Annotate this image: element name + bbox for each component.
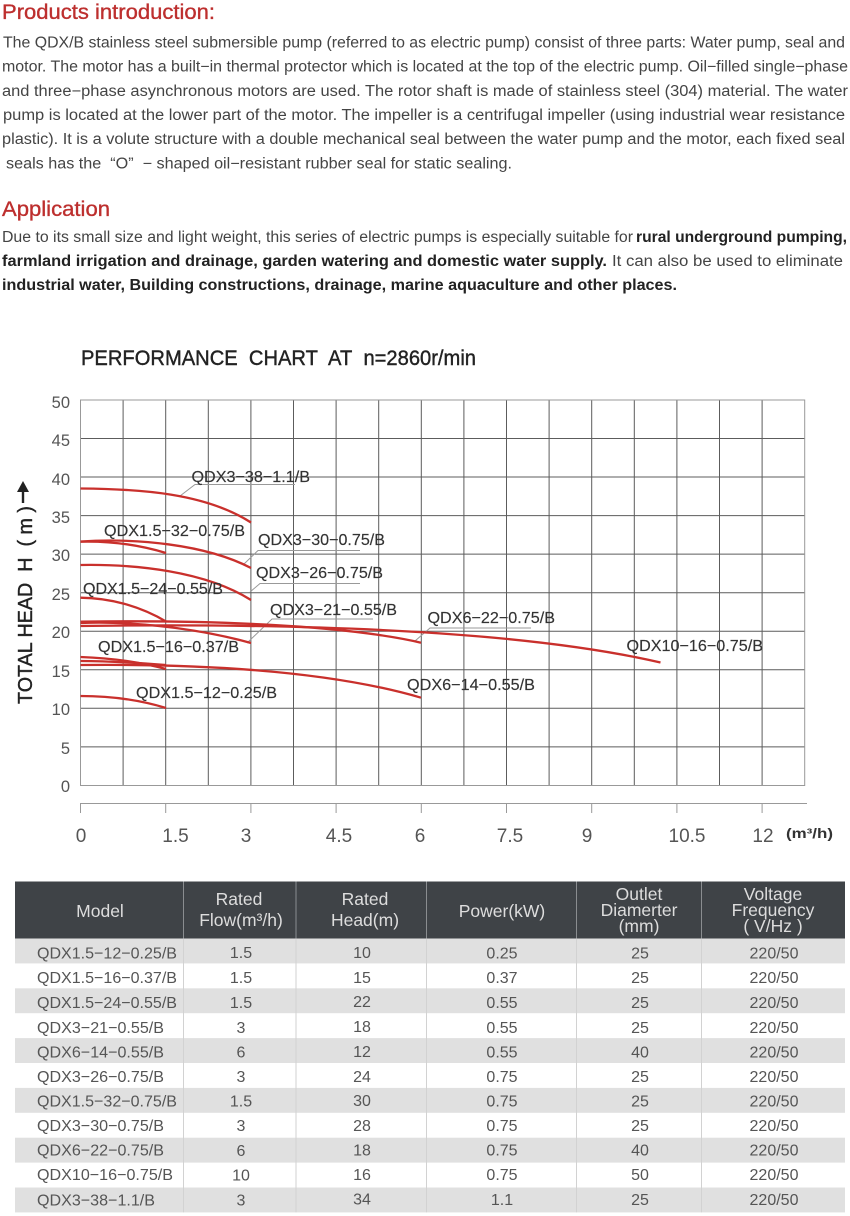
table header: Rated [342, 889, 388, 909]
row: QDX3-26-0.75/B: 0.75 [486, 1069, 518, 1086]
x axis tick labels: 6 [415, 826, 425, 847]
row: QDX1.5-12-0.25/B: 0.25 [486, 946, 518, 962]
text block: product description: and three−phase asynchronous motors are used. The rotor shaft is made of stainless steel (304) material. The water [2, 83, 848, 100]
y axis tick labels: 35 [52, 509, 70, 527]
x axis tick labels: 7.5 [497, 826, 523, 847]
table header: ( V/Hz ) [743, 916, 803, 936]
row: QDX1.5-16-0.37/B: 25 [631, 970, 649, 987]
text block: product description: The QDX/B stainless steel submersible pump (referred to as electric pump) consist of three parts: Water pump, seal and [3, 34, 845, 52]
x axis tick labels: 1.5 [162, 826, 189, 847]
table column separators [184, 938, 702, 1212]
row: QDX6-14-0.55/B: 0.55 [486, 1044, 518, 1062]
table header: Voltage [744, 884, 802, 904]
table header: Flow(m³/h) [199, 910, 283, 930]
row: QDX10-16-0.75/B: 0.75 [486, 1167, 518, 1184]
row: QDX1.5-32-0.75/B: 30 [353, 1093, 371, 1110]
row: QDX1.5-16-0.37/B: QDX1.5−16−0.37/B [37, 970, 177, 987]
curve labels: QDX3−26−0.75/B [256, 565, 383, 582]
text block: application description: rural underground pumping, [636, 229, 847, 246]
row: QDX6-22-0.75/B: QDX6−22−0.75/B [37, 1142, 164, 1160]
chart: performance chart [15, 347, 833, 847]
row: QDX6-22-0.75/B: 6 [237, 1143, 246, 1160]
text block: application description: It can also be used to eliminate [612, 253, 843, 270]
curve labels: QDX3−21−0.55/B [270, 602, 397, 619]
row: QDX1.5-12-0.25/B [37, 945, 799, 962]
row: QDX3-26-0.75/B: 3 [237, 1069, 246, 1086]
text block: application description: farmland irrigation and drainage, garden watering and domestic water supply. [2, 253, 607, 270]
y axis tick labels: 5 [61, 740, 70, 758]
icon: up arrow on y axis [22, 490, 24, 503]
row: QDX1.5-24-0.55/B: 220/50 [750, 995, 799, 1012]
curve labels: QDX3−38−1.1/B [192, 469, 310, 486]
text block: product description: plastic). It is a volute structure with a double mechanical seal between the water pump and the motor, each fixed seal [2, 131, 845, 148]
row: QDX3-21-0.55/B: 25 [631, 1020, 649, 1037]
row: QDX3-26-0.75/B: 25 [631, 1069, 649, 1086]
y axis title: TOTAL HEAD H ( m ) [15, 506, 37, 704]
row: QDX1.5-16-0.37/B: 0.37 [486, 970, 518, 987]
row: QDX1.5-32-0.75/B: 25 [631, 1094, 649, 1110]
table header: Frequency [732, 900, 815, 920]
text block: product description: motor. The motor has a built−in thermal protector which is located at the top of the electric pump. Oil−filled single−phase [2, 58, 848, 76]
row: QDX1.5-24-0.55/B: QDX1.5−24−0.55/B [37, 995, 177, 1012]
row: QDX3-38-1.1/B: 25 [631, 1192, 649, 1209]
y axis tick labels: 15 [52, 663, 70, 681]
table header: Head(m) [331, 910, 399, 930]
leader lines [180, 484, 531, 643]
text block: application description [2, 229, 847, 294]
row: QDX3-21-0.55/B: 3 [237, 1020, 246, 1037]
x axis tick labels: 0 [76, 826, 86, 847]
row: QDX3-38-1.1/B: 3 [237, 1192, 246, 1210]
x axis tick labels: 4.5 [326, 826, 352, 847]
curve labels: QDX10−16−0.75/B [626, 638, 763, 655]
row: QDX6-22-0.75/B: 220/50 [750, 1142, 799, 1160]
row: QDX3-21-0.55/B: 18 [353, 1019, 371, 1036]
row: QDX6-22-0.75/B: 40 [631, 1142, 649, 1160]
row: QDX3-21-0.55/B: 0.55 [486, 1020, 518, 1037]
row: QDX1.5-16-0.37/B: 1.5 [230, 970, 252, 987]
row: QDX1.5-24-0.55/B [37, 994, 799, 1012]
x axis tick labels: 10.5 [669, 826, 705, 847]
table header [15, 882, 845, 938]
row: QDX6-22-0.75/B: 18 [353, 1142, 371, 1160]
y axis tick labels: 40 [52, 471, 70, 489]
text block: product description: pump is located at the lower part of the motor. The impeller is a centrifugal impeller (using industrial wear resistance [3, 107, 845, 124]
row: QDX1.5-32-0.75/B [37, 1093, 799, 1110]
y axis tick labels: 50 [52, 394, 70, 412]
table header: Diamerter [601, 900, 678, 920]
y axis tick labels [52, 394, 70, 796]
y axis tick labels: 30 [52, 547, 70, 565]
row: QDX3-30-0.75/B: 25 [631, 1118, 649, 1135]
y axis tick labels: 45 [52, 432, 70, 450]
x axis unit: (m³/h) [786, 825, 833, 841]
row: QDX1.5-24-0.55/B: 1.5 [230, 995, 252, 1012]
panel: application [2, 198, 847, 294]
row: QDX1.5-24-0.55/B: 25 [631, 995, 649, 1012]
row: QDX10-16-0.75/B [37, 1167, 799, 1184]
row: QDX3-30-0.75/B [37, 1118, 799, 1135]
row: QDX1.5-32-0.75/B: 1.5 [230, 1094, 252, 1110]
y axis tick labels: 0 [61, 778, 70, 796]
table header: Power(kW) [459, 901, 545, 921]
x axis scale [80, 804, 807, 813]
y axis tick labels: 20 [52, 624, 70, 642]
text block: application description: Due to its small size and light weight, this series of electric pumps is especially suitable for [2, 229, 633, 246]
curve labels: QDX6−14−0.55/B [407, 677, 535, 694]
text block: product description [2, 34, 848, 172]
curve labels: QDX1.5−32−0.75/B [104, 523, 245, 540]
x axis tick labels: 12 [752, 826, 774, 847]
row: QDX1.5-12-0.25/B: 25 [631, 946, 649, 962]
row: QDX1.5-12-0.25/B: 1.5 [230, 945, 252, 962]
row: QDX10-16-0.75/B: 16 [353, 1167, 371, 1184]
row: QDX10-16-0.75/B: QDX10−16−0.75/B [37, 1167, 173, 1184]
y axis tick labels: 25 [52, 586, 70, 604]
text block: product description: seals has the “O” − shaped oil−resistant rubber seal for static sealing. [6, 156, 512, 172]
row: QDX6-14-0.55/B: 12 [353, 1044, 371, 1061]
row: QDX1.5-24-0.55/B: 0.55 [486, 995, 518, 1012]
row: QDX3-21-0.55/B: 220/50 [750, 1020, 799, 1037]
row: QDX1.5-12-0.25/B: QDX1.5−12−0.25/B [37, 946, 177, 962]
row: QDX3-30-0.75/B: 28 [353, 1118, 371, 1135]
table header: (mm) [619, 916, 659, 936]
row: QDX3-26-0.75/B: QDX3−26−0.75/B [37, 1069, 164, 1086]
row: QDX1.5-12-0.25/B: 10 [353, 945, 371, 962]
row: QDX3-30-0.75/B: QDX3−30−0.75/B [37, 1118, 164, 1135]
table: model specifications [15, 882, 845, 1212]
curve labels: QDX6−22−0.75/B [428, 610, 555, 627]
panel: products introduction [2, 1, 848, 172]
text block: application description: industrial water, Building constructions, drainage, marine aquaculture and other places. [2, 277, 677, 294]
row: QDX1.5-16-0.37/B: 220/50 [750, 970, 799, 987]
heading: products introduction: Products introduction: [2, 1, 215, 24]
curve labels: QDX3−30−0.75/B [258, 532, 385, 549]
y axis tick labels: 10 [52, 701, 70, 719]
row: QDX1.5-16-0.37/B [37, 970, 799, 987]
row: QDX10-16-0.75/B: 10 [232, 1168, 250, 1184]
row: QDX3-38-1.1/B: 34 [353, 1192, 371, 1208]
table header: Outlet [616, 884, 662, 904]
chart title: PERFORMANCE CHART AT n=2860r/min [81, 347, 476, 370]
table header: Rated [216, 889, 262, 909]
icon: up arrow head [17, 481, 29, 492]
row: QDX1.5-32-0.75/B: QDX1.5−32−0.75/B [37, 1094, 177, 1110]
row: QDX3-38-1.1/B [37, 1192, 799, 1210]
row: QDX6-14-0.55/B: 6 [237, 1044, 246, 1062]
performance curves [80, 488, 660, 708]
heading: application: Application [2, 198, 110, 221]
row: QDX1.5-32-0.75/B: 0.75 [486, 1094, 518, 1110]
row: QDX1.5-24-0.55/B: 22 [353, 994, 371, 1011]
row: QDX6-22-0.75/B: 0.75 [486, 1142, 518, 1160]
curve labels [83, 469, 763, 702]
row: QDX6-14-0.55/B: QDX6−14−0.55/B [37, 1044, 164, 1062]
row: QDX3-38-1.1/B: 1.1 [491, 1192, 513, 1209]
row: QDX6-14-0.55/B: 220/50 [750, 1044, 799, 1062]
curve labels: QDX1.5−16−0.37/B [98, 639, 239, 656]
row: QDX3-21-0.55/B [37, 1019, 799, 1037]
x axis tick labels: 9 [582, 826, 592, 847]
row: QDX10-16-0.75/B: 50 [631, 1167, 649, 1184]
x axis tick labels [76, 826, 774, 847]
row: QDX3-30-0.75/B: 3 [237, 1118, 246, 1135]
row: QDX1.5-12-0.25/B: 220/50 [750, 946, 799, 962]
row: QDX3-21-0.55/B: QDX3−21−0.55/B [37, 1020, 164, 1037]
row: QDX1.5-16-0.37/B: 15 [353, 970, 371, 987]
row: QDX10-16-0.75/B: 220/50 [750, 1167, 799, 1184]
row: QDX3-30-0.75/B: 220/50 [750, 1118, 799, 1135]
x axis tick labels: 3 [241, 826, 251, 847]
row: QDX1.5-32-0.75/B: 220/50 [750, 1094, 799, 1110]
curve labels: QDX1.5−12−0.25/B [136, 685, 277, 702]
row: QDX3-26-0.75/B: 220/50 [750, 1069, 799, 1086]
table row backgrounds [15, 938, 845, 1212]
row: QDX6-14-0.55/B [37, 1044, 799, 1062]
row: QDX3-30-0.75/B: 0.75 [486, 1118, 518, 1135]
row: QDX6-22-0.75/B [37, 1142, 799, 1160]
row: QDX6-14-0.55/B: 40 [631, 1044, 649, 1062]
row: QDX3-26-0.75/B [37, 1069, 799, 1086]
curve labels: QDX1.5−24−0.55/B [83, 581, 223, 598]
row: QDX3-26-0.75/B: 24 [353, 1069, 371, 1086]
table header: Model [76, 901, 124, 921]
row: QDX3-38-1.1/B: QDX3−38−1.1/B [37, 1192, 155, 1210]
row: QDX3-38-1.1/B: 220/50 [750, 1192, 799, 1209]
